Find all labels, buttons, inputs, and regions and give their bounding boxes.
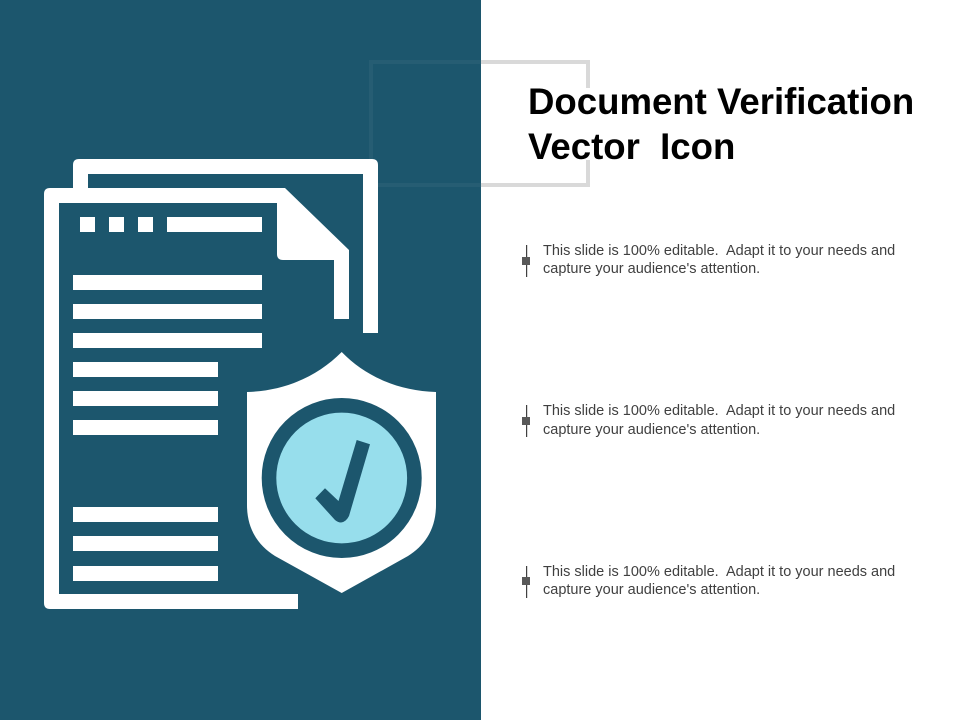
document short text lines — [73, 362, 218, 581]
bullet item 1: This slide is 100% editable. Adapt it to your needs and — [543, 243, 895, 259]
title: Document Verification — [528, 81, 914, 122]
check mark — [315, 440, 370, 522]
verification circle — [269, 405, 414, 551]
bullet item 1 — [522, 243, 895, 277]
title second line: Vector Icon — [528, 126, 735, 167]
bullet item 2 — [522, 403, 895, 438]
front document outline with folded corner — [44, 188, 349, 609]
shield — [247, 352, 436, 593]
icon: document verification — [44, 159, 436, 609]
bullet item 3 — [522, 564, 895, 598]
back document outline — [73, 159, 378, 333]
document long text lines — [73, 275, 262, 348]
bullet item 3: capture your audience's attention. — [543, 582, 760, 598]
bullet item 2: This slide is 100% editable. Adapt it to your needs and — [543, 403, 895, 419]
document header marks — [80, 217, 262, 232]
background panel — [0, 0, 481, 720]
bullet item 2: capture your audience's attention. — [543, 422, 760, 438]
bullet item 1: capture your audience's attention. — [543, 261, 760, 277]
bullet item 3: This slide is 100% editable. Adapt it to your needs and — [543, 564, 895, 580]
decorative title frame — [369, 60, 592, 187]
